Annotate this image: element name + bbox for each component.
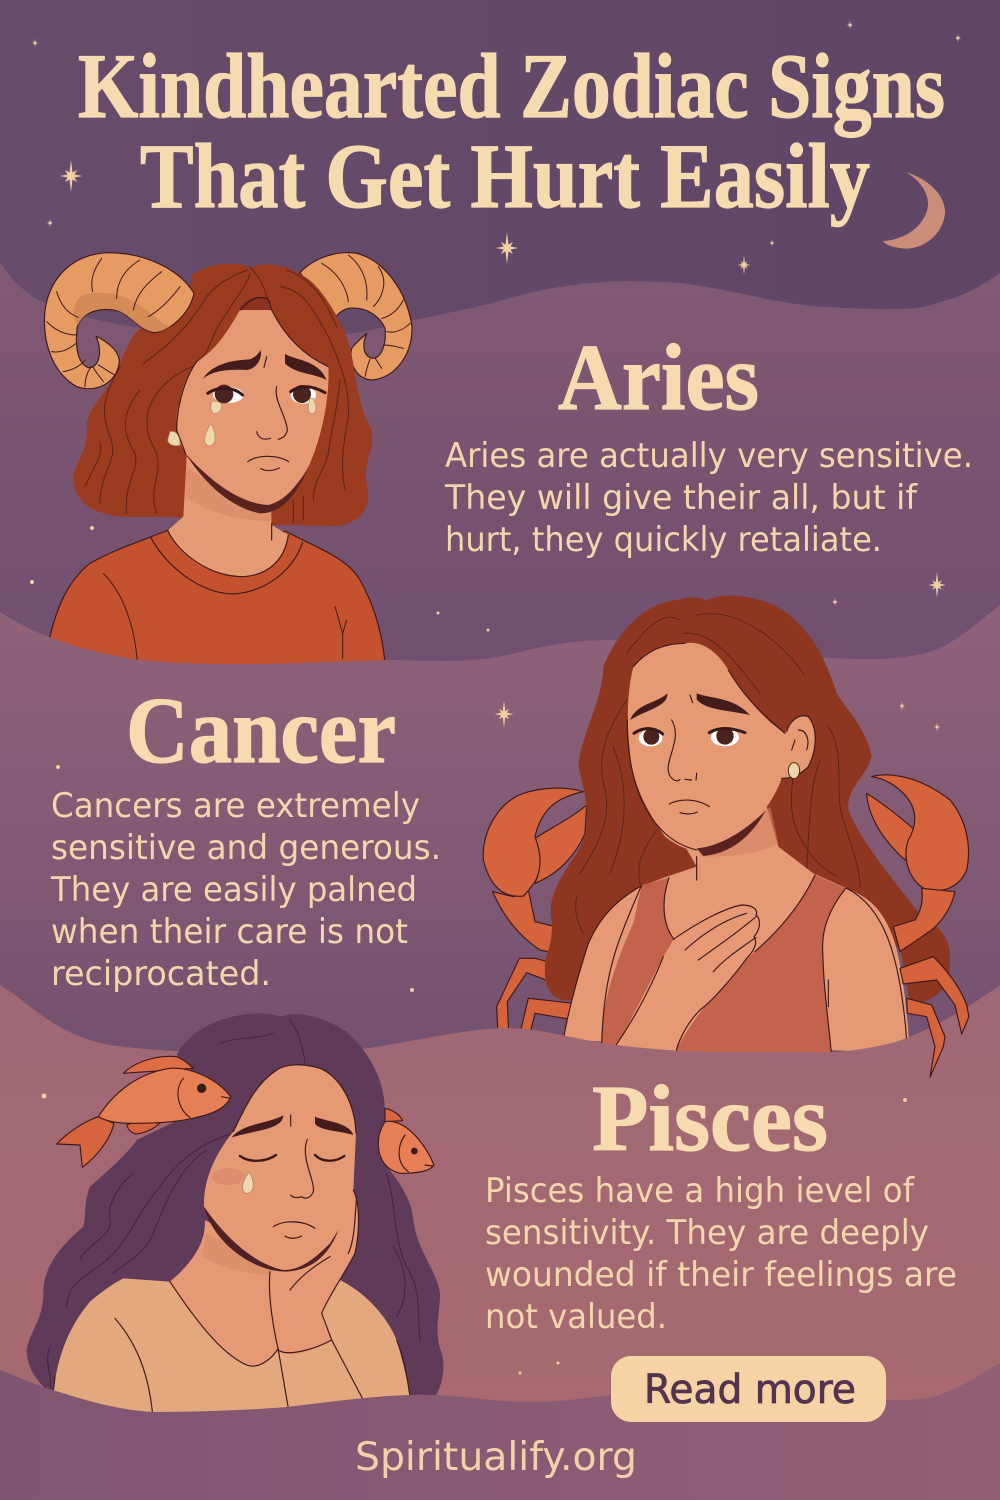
- neck and chest: [170, 1220, 283, 1366]
- brows: [232, 1115, 353, 1137]
- text: Pisces description: not valued.: [485, 1297, 667, 1337]
- text: Aries description: hurt, they quickly retaliate.: [445, 520, 882, 560]
- heading: Aries: Aries: [558, 326, 759, 430]
- face: [628, 643, 815, 852]
- earring: [788, 763, 800, 779]
- hair strands: [576, 614, 860, 933]
- text: Aries description: [444, 436, 973, 560]
- background band: Pisces: [0, 985, 1000, 1500]
- text: Cancer description: reciprocated.: [51, 954, 271, 994]
- hand: [269, 1190, 359, 1355]
- eyes: [634, 727, 745, 746]
- crab legs and claws, left: [483, 788, 590, 1033]
- blush: [212, 1168, 245, 1185]
- heading: Cancer: Cancer: [126, 679, 396, 783]
- shirt: [48, 530, 385, 677]
- text: Aries description: Aries are actually very sensitive.: [445, 436, 973, 476]
- closed eyes: [240, 1155, 344, 1161]
- hair: [545, 596, 950, 1003]
- chest: [563, 807, 910, 1053]
- shirt folds: [103, 573, 347, 663]
- tear: [243, 1172, 253, 1193]
- footer: website: Spiritualify.org: [355, 1435, 637, 1480]
- background band: Cancer: [0, 605, 1000, 1100]
- nose and mouth: [248, 357, 289, 471]
- hair: [27, 1013, 443, 1397]
- stars: lower: [42, 1094, 934, 1409]
- button: read more: Read more: [644, 1367, 856, 1413]
- jaw shadow: [204, 1207, 338, 1272]
- figure: Cancer woman with crab: [483, 596, 969, 1057]
- right horn: [300, 253, 412, 380]
- collar: [151, 523, 303, 594]
- body outlines: [563, 857, 907, 1057]
- brows: [203, 350, 327, 380]
- button: read more: [611, 1356, 886, 1422]
- jaw shadow: [697, 810, 766, 856]
- fish left: [57, 1056, 231, 1167]
- crab lower right legs: [900, 957, 969, 1077]
- text: Pisces description: Pisces have a high ievel of: [485, 1171, 915, 1211]
- tank top: [602, 875, 846, 1057]
- background band: Aries: [0, 262, 1000, 700]
- stars: upper: [30, 20, 961, 631]
- shirt: [53, 1278, 410, 1430]
- text: Cancer description: Cancers are extremely: [51, 786, 420, 826]
- nose and mouth: [668, 695, 709, 814]
- face outline: [627, 643, 815, 850]
- eyes: [208, 385, 325, 404]
- hair strands: [48, 1020, 420, 1390]
- background band: footer: [0, 1363, 1000, 1500]
- text: Cancer description: [50, 786, 441, 994]
- heading: Pisces: Pisces: [592, 1067, 828, 1171]
- icon: crescent moon: [883, 172, 945, 249]
- hair: [73, 264, 372, 526]
- figure: Pisces woman with fish: [27, 1013, 443, 1430]
- text: Cancer description: sensitive and generous.: [51, 828, 441, 868]
- body outlines: [53, 1065, 410, 1412]
- stars: middle: [56, 700, 940, 992]
- face: [176, 310, 329, 505]
- left horn: [44, 253, 194, 389]
- fish right: [378, 1108, 434, 1173]
- text: Pisces description: wounded if their feelings are: [485, 1255, 957, 1295]
- title: [78, 35, 945, 227]
- text: Pisces description: sensitivity. They are deeply: [485, 1213, 929, 1253]
- text: Aries description: They will give their all, but if: [444, 478, 918, 518]
- crab legs and claws, right: [867, 775, 969, 952]
- text: Pisces description: [485, 1171, 957, 1337]
- tears: [168, 398, 316, 446]
- face: [204, 1065, 356, 1270]
- face outline: [177, 298, 328, 454]
- brows: [630, 693, 750, 720]
- title: That Get Hurt Easily: [140, 125, 870, 227]
- text: Cancer description: They are easily palned: [50, 870, 417, 910]
- neck: [168, 457, 288, 577]
- figure: Aries woman with ram horns: [44, 253, 412, 677]
- jaw shadow: [186, 454, 308, 513]
- hair strands: [85, 267, 349, 523]
- hand: [615, 905, 759, 1057]
- nose and mouth: [273, 1115, 315, 1238]
- text: Cancer description: when their care is not: [51, 912, 408, 952]
